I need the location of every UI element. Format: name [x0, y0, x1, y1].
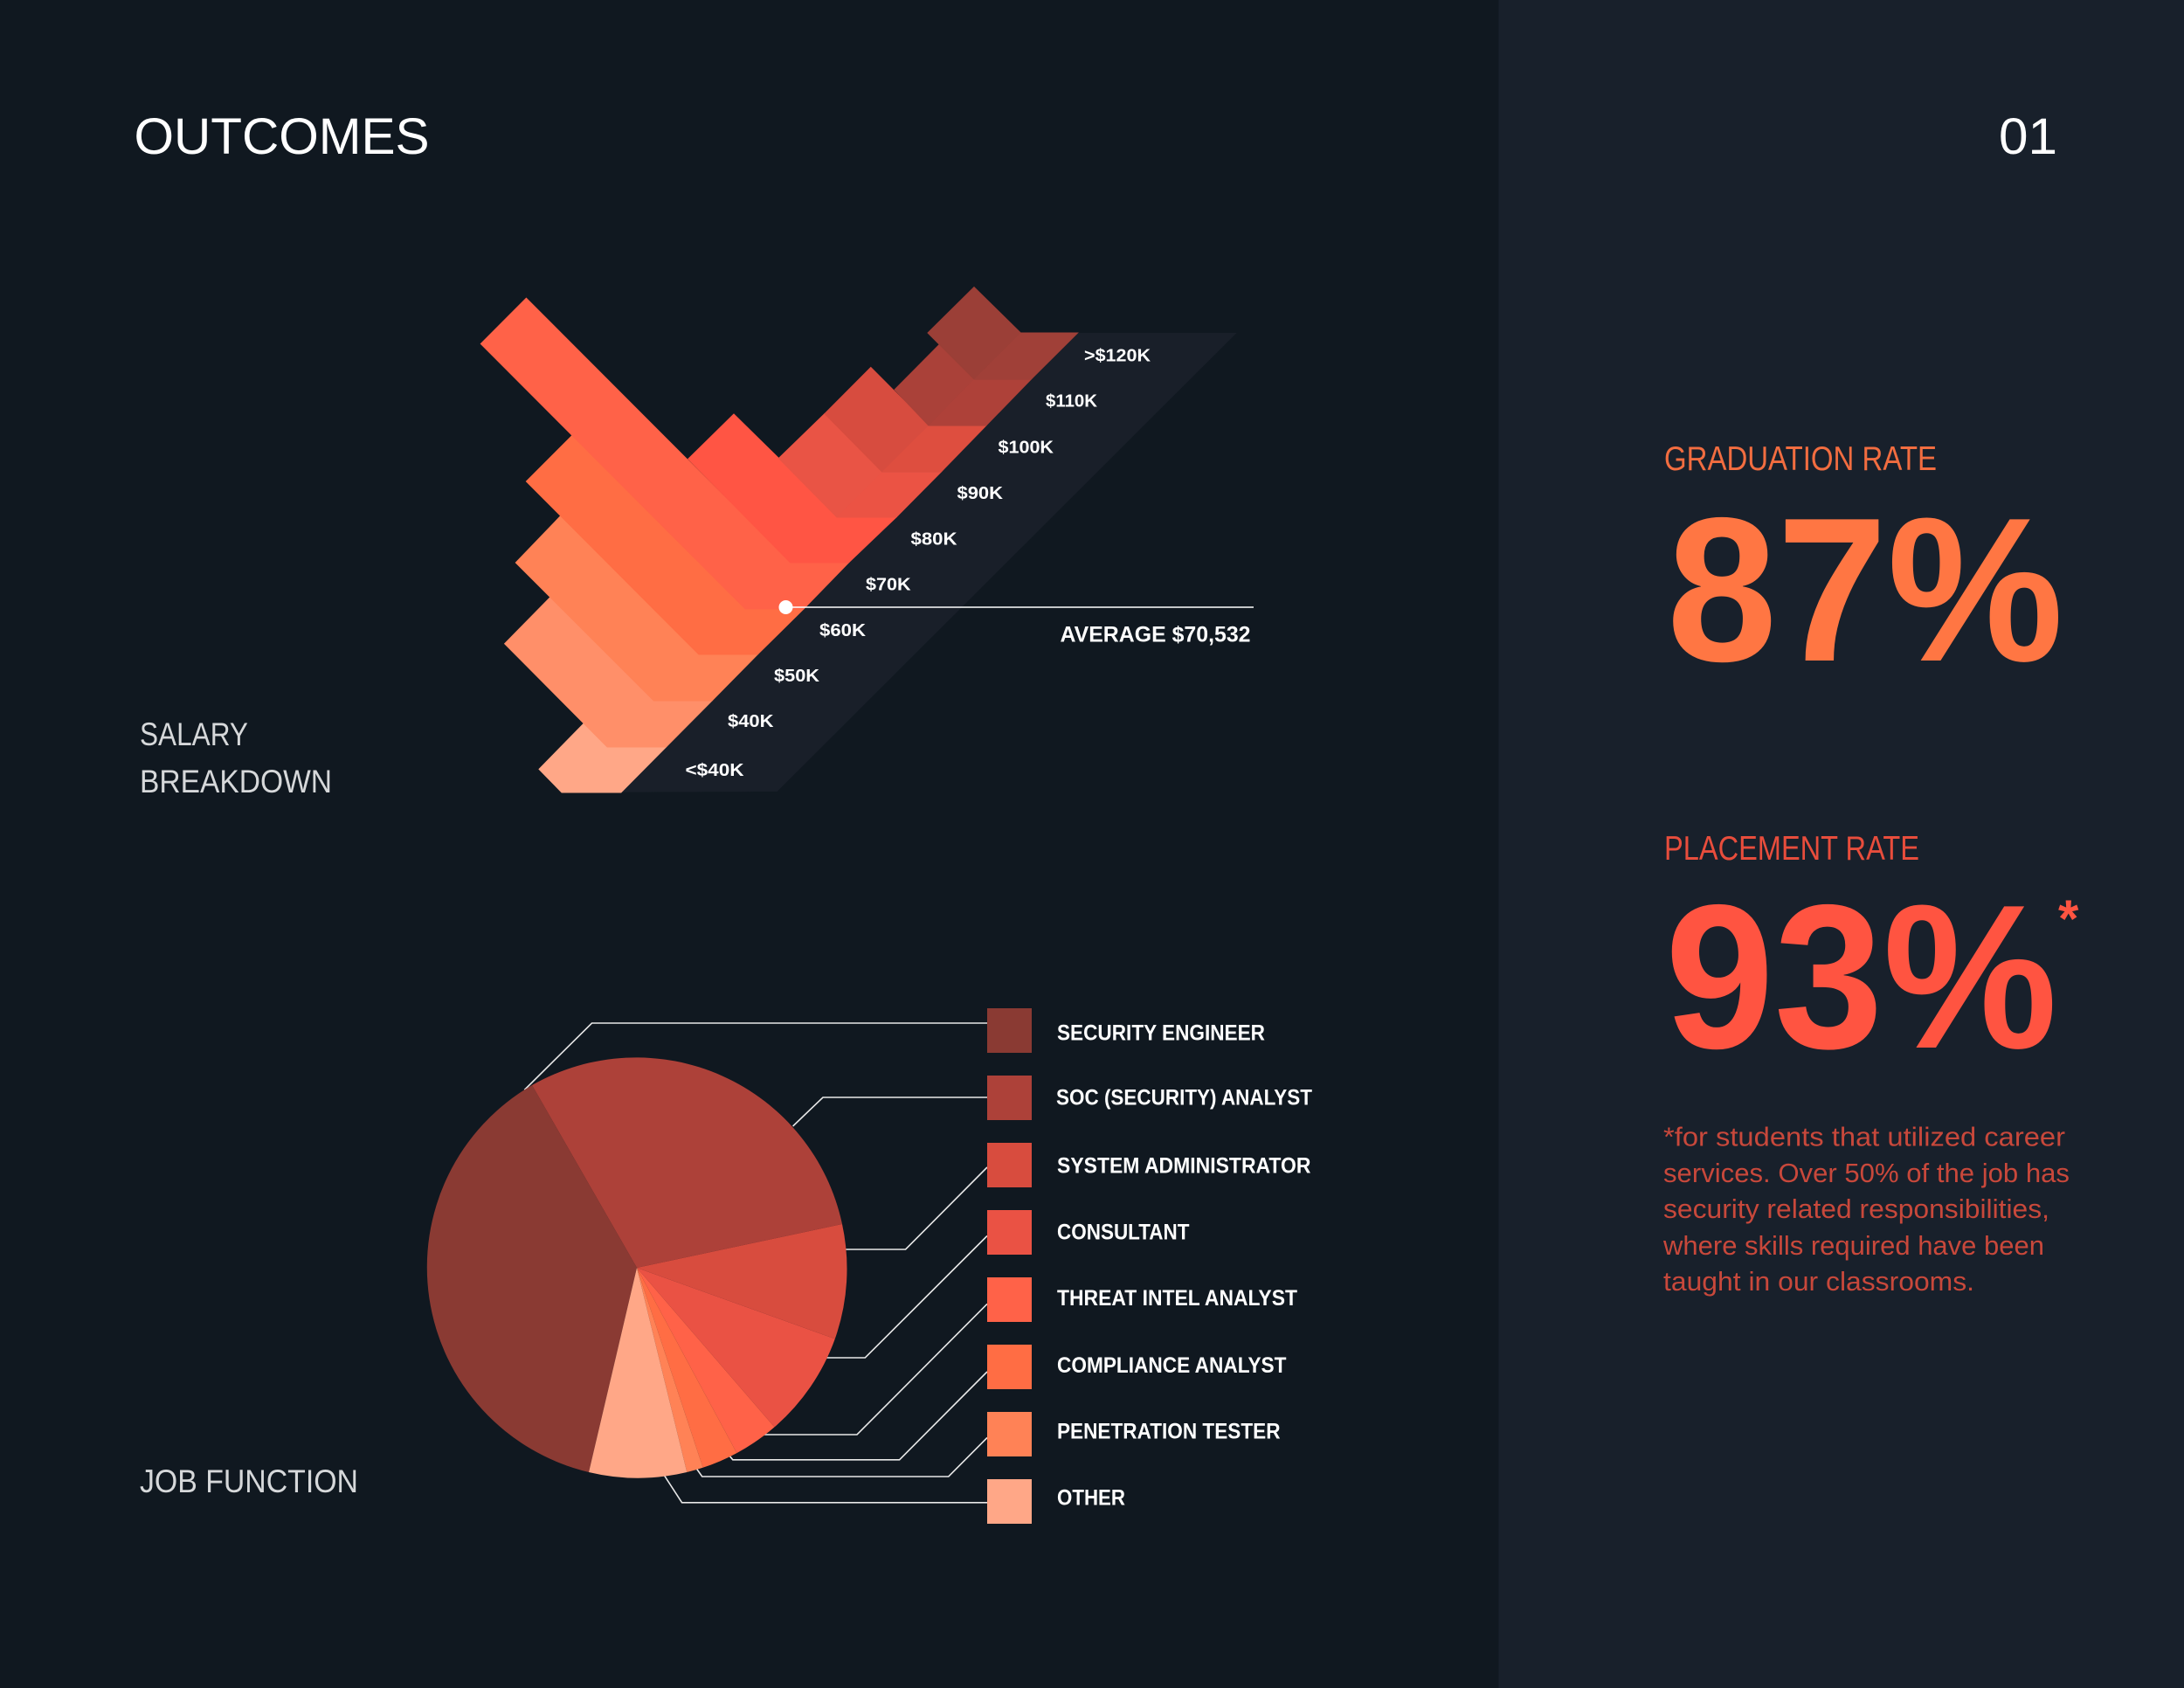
- stat: graduation rate: GRADUATION RATE: [1664, 440, 1937, 478]
- legend item: threat intel analyst: THREAT INTEL ANALYST: [1057, 1286, 1297, 1311]
- axis labels: $80K: [910, 529, 957, 549]
- slice: compliance analyst: [637, 1268, 736, 1468]
- bar: $80K: [688, 414, 896, 563]
- stat: placement rate: *: [2058, 889, 2079, 948]
- legend item: consultant: [987, 1210, 1190, 1255]
- bar: $40K: [505, 598, 712, 747]
- legend item: system administrator: [987, 1143, 1310, 1187]
- bar: $110K: [895, 344, 1031, 425]
- bar: $70K: [480, 298, 848, 609]
- average marker: AVERAGE $70,532: [1061, 623, 1251, 647]
- footnote: services. Over 50% of the job has: [1663, 1158, 2070, 1188]
- slice: SOC analyst: [532, 1057, 842, 1268]
- stat: placement rate: PLACEMENT RATE: [1664, 830, 1919, 868]
- axis labels: $110K: [1046, 392, 1098, 412]
- axis labels: $60K: [819, 621, 867, 640]
- legend item: system administrator: SYSTEM ADMINISTRATOR: [1057, 1154, 1310, 1179]
- legend item: security engineer: SECURITY ENGINEER: [1057, 1020, 1265, 1045]
- axis labels: $90K: [957, 484, 1004, 503]
- legend: job function: [987, 1008, 1312, 1524]
- legend item: penetration tester: PENETRATION TESTER: [1057, 1419, 1281, 1443]
- bar: $100K: [825, 367, 986, 472]
- leader lines: [524, 1023, 987, 1503]
- heading: salary breakdown: [140, 716, 332, 799]
- footnote: security related responsibilities,: [1663, 1193, 2049, 1224]
- heading: salary breakdown: SALARY: [140, 716, 248, 752]
- legend item: security engineer: [987, 1008, 1265, 1053]
- footnote: where skills required have been: [1662, 1230, 2044, 1261]
- axis labels: $70K: [866, 575, 911, 594]
- page number: 01: [1999, 108, 2057, 165]
- chart: salary breakdown: [480, 287, 1254, 792]
- axis labels: $40K: [728, 712, 774, 731]
- legend item: compliance analyst: COMPLIANCE ANALYST: [1057, 1353, 1286, 1378]
- panel: right sidebar background: [1499, 0, 2184, 1688]
- heading: job function: JOB FUNCTION: [140, 1463, 358, 1499]
- slice: other: [589, 1268, 687, 1478]
- heading: salary breakdown: BREAKDOWN: [140, 764, 332, 799]
- axis labels: $100K: [998, 438, 1054, 457]
- axis labels: $50K: [774, 667, 820, 686]
- average marker: [779, 600, 1254, 647]
- bar: over $120K: [928, 287, 1078, 379]
- legend item: penetration tester: [987, 1412, 1281, 1456]
- legend item: compliance analyst: [987, 1345, 1286, 1389]
- bar: $50K: [515, 516, 757, 701]
- stat: graduation rate: 87%: [1667, 474, 2063, 704]
- legend item: SOC analyst: SOC (SECURITY) ANALYST: [1056, 1086, 1312, 1110]
- stat: placement rate: 93%: [1665, 861, 2057, 1091]
- bar: $90K: [778, 414, 941, 517]
- slice: consultant: [637, 1268, 835, 1427]
- legend item: threat intel analyst: [987, 1277, 1297, 1322]
- legend item: other: OTHER: [1057, 1486, 1125, 1511]
- legend item: SOC analyst: [987, 1076, 1312, 1120]
- footnote: [1662, 1122, 2070, 1297]
- chart: job function pie: [427, 1023, 987, 1503]
- title: OUTCOMES: [135, 108, 430, 165]
- bar: $60K: [526, 436, 804, 654]
- axis labels: <$40K: [685, 761, 744, 780]
- axis labels: [685, 346, 1151, 780]
- footnote: taught in our classrooms.: [1663, 1266, 1974, 1297]
- slice: threat intel analyst: [637, 1268, 774, 1453]
- slice: penetration tester: [637, 1268, 703, 1472]
- diagonal backing panel: [562, 333, 1237, 792]
- bar: under $40K: [539, 723, 666, 792]
- legend item: other: [987, 1479, 1125, 1524]
- slice: system administrator: [637, 1224, 847, 1339]
- footnote: *for students that utilized career: [1663, 1122, 2065, 1152]
- legend item: consultant: CONSULTANT: [1057, 1221, 1190, 1245]
- slice: security engineer: [427, 1085, 637, 1472]
- axis labels: >$120K: [1084, 346, 1151, 365]
